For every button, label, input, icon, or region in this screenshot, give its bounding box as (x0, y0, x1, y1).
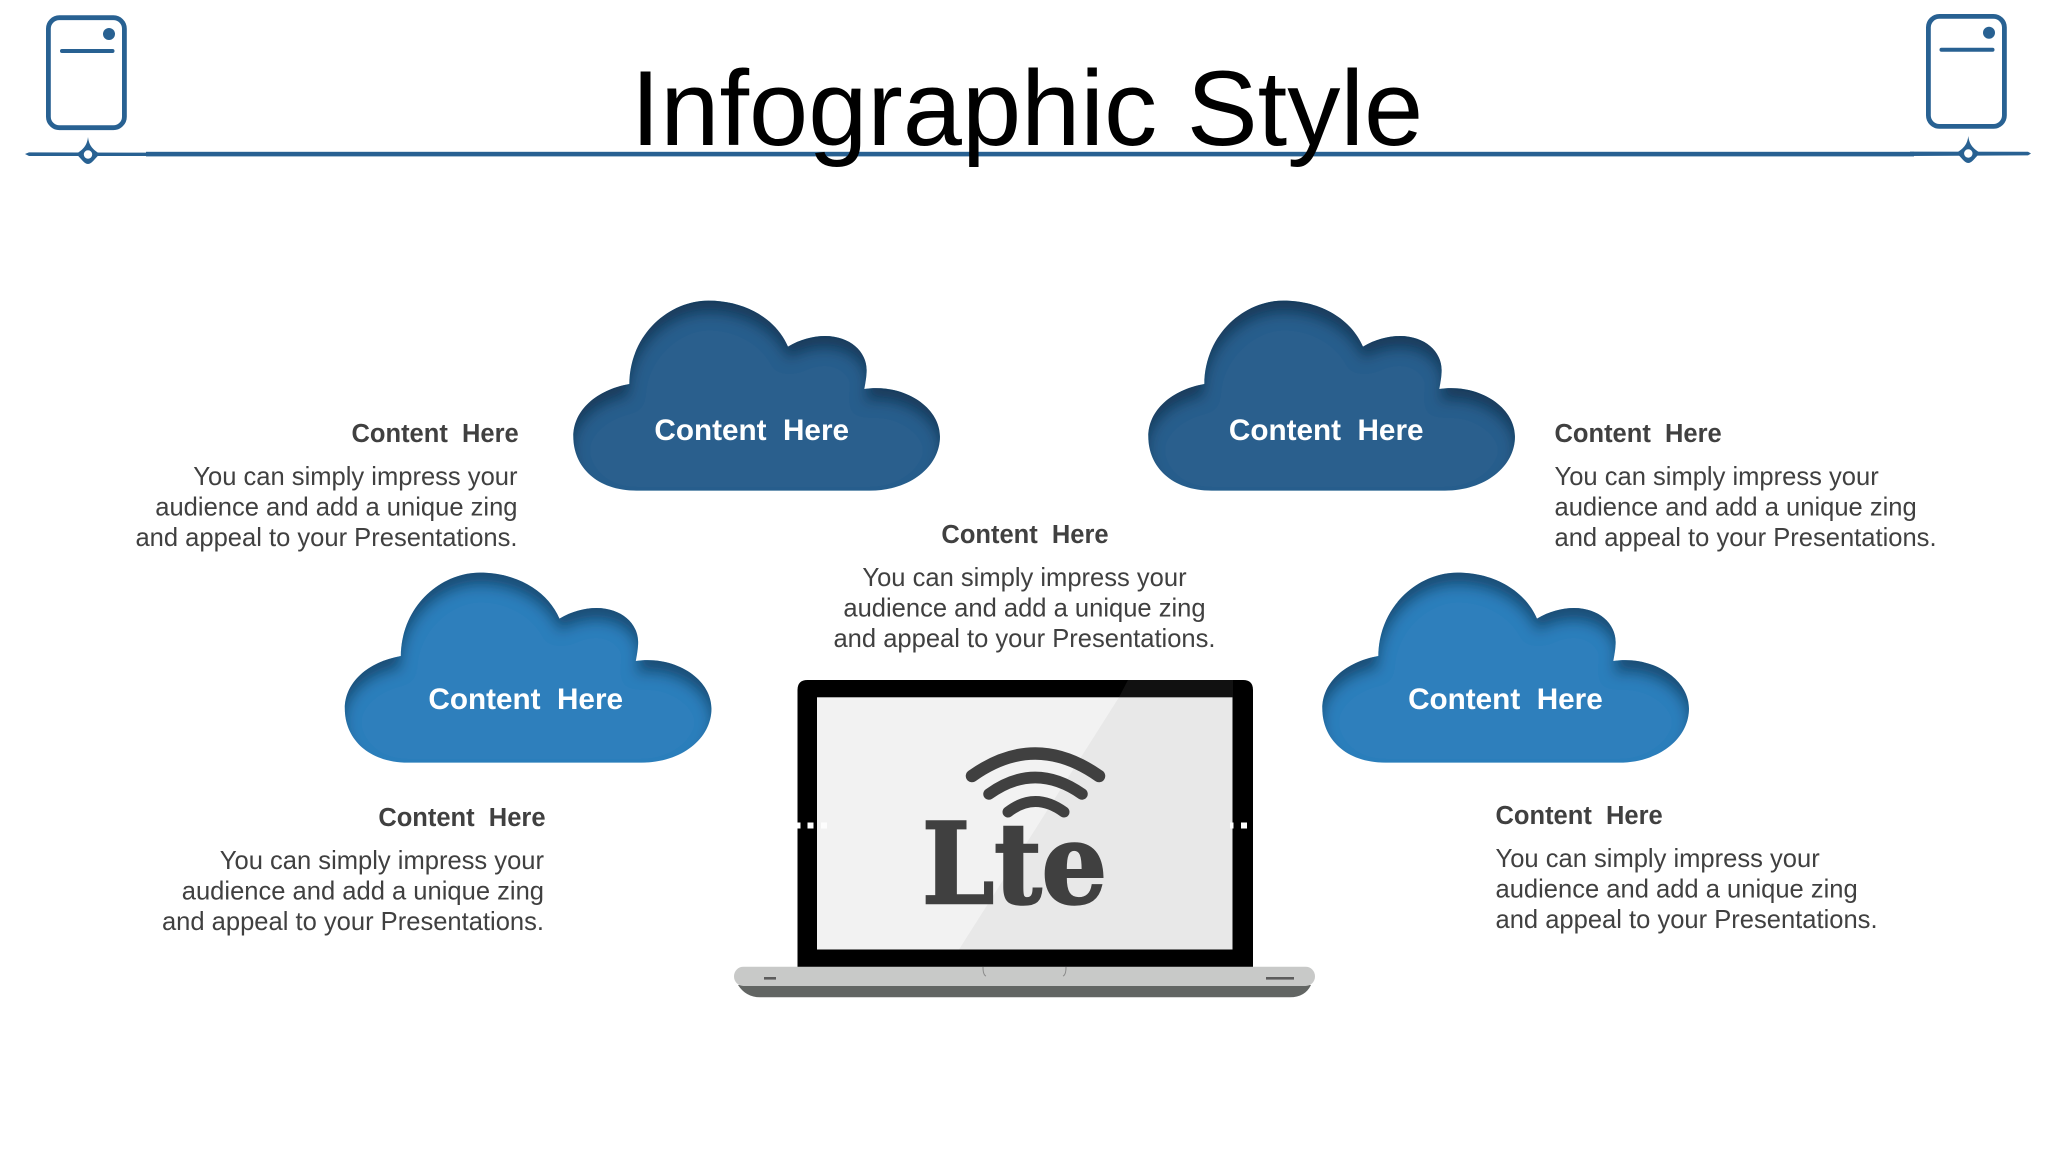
cloud: top left (573, 301, 940, 491)
laptop (734, 680, 1315, 997)
icon: LTE signal arcs (972, 754, 1099, 812)
laptop lid (798, 680, 1253, 970)
cloud: lower right: Content Here (1408, 683, 1603, 716)
logo text: Lte (922, 800, 1107, 930)
header rule with end nodes (25, 136, 2031, 164)
laptop screen (817, 680, 1233, 950)
cloud: top right (1148, 301, 1515, 491)
text block: lower right: Content Here (1496, 802, 1663, 830)
text block: lower right: and appeal to your Presentations. (1496, 906, 1878, 934)
text block: top right: audience and add a unique zing (1554, 494, 1917, 522)
text block: center (833, 521, 1216, 653)
text block: top left: You can simply impress your (193, 463, 518, 491)
laptop hinge dots (797, 822, 1247, 828)
text block: center: audience and add a unique zing (843, 594, 1206, 622)
text block: top right: and appeal to your Presentations. (1554, 524, 1937, 552)
laptop base (734, 967, 1315, 997)
text block: lower right: audience and add a unique zing (1496, 876, 1858, 904)
cloud: top right: Content Here (1229, 414, 1424, 447)
text block: lower left (162, 804, 546, 936)
icon: left device (48, 18, 124, 128)
cloud: top left: Content Here (654, 414, 849, 447)
text block: lower left: audience and add a unique zing (182, 878, 544, 906)
text block: center: and appeal to your Presentations. (833, 625, 1216, 653)
text block: lower right (1496, 802, 1878, 934)
cloud: lower left: Content Here (428, 683, 623, 716)
text block: top left: Content Here (352, 420, 519, 448)
text block: lower left: and appeal to your Presentations. (162, 908, 544, 936)
text block: top left (135, 420, 519, 552)
text block: lower left: You can simply impress your (220, 847, 544, 875)
text block: top right: Content Here (1554, 420, 1722, 448)
icon: right device (1928, 16, 2004, 126)
text block: top left: and appeal to your Presentations. (135, 524, 518, 552)
text block: lower left: Content Here (378, 804, 546, 832)
text block: center: You can simply impress your (862, 564, 1187, 592)
text block: lower right: You can simply impress your (1496, 845, 1820, 873)
text block: top left: audience and add a unique zing (155, 494, 518, 522)
cloud: lower left (345, 573, 711, 763)
title: Infographic Style (631, 49, 1423, 168)
text block: top right (1554, 420, 1937, 552)
cloud: lower right (1322, 573, 1689, 763)
text block: top right: You can simply impress your (1554, 463, 1879, 491)
text block: center: Content Here (941, 521, 1109, 549)
